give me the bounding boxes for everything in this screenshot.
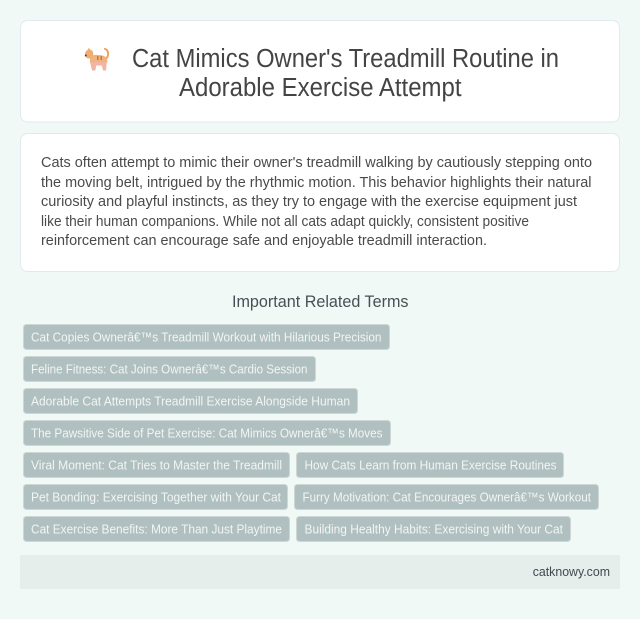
text block: summary paragraph (41, 155, 592, 249)
tag 2 (24, 356, 316, 382)
tag 9 (24, 516, 290, 542)
tag 4 (24, 420, 390, 446)
tag 7: Pet Bonding: Exercising Together with Your Cat (31, 490, 281, 504)
tag 2: Feline Fitness: Cat Joins Ownerâ€™s Cardio Session (31, 362, 308, 376)
tag 1: Cat Copies Ownerâ€™s Treadmill Workout with Hilarious Precision (31, 330, 382, 344)
tag 4: The Pawsitive Side of Pet Exercise: Cat Mimics Ownerâ€™s Moves (31, 426, 382, 440)
text block: summary paragraph: Cats often attempt to mimic their owner's treadmill walking by cautiously stepping onto (41, 155, 592, 171)
title (132, 45, 559, 102)
panel: title card (20, 20, 620, 122)
tag 10: Building Healthy Habits: Exercising with Your Cat (304, 522, 563, 536)
tag 3: Adorable Cat Attempts Treadmill Exercise Alongside Human (31, 394, 350, 408)
tag 6 (296, 452, 564, 478)
tag list (24, 324, 598, 542)
tag 8 (294, 484, 598, 510)
text block: summary paragraph: like their human companions. While not all cats adapt quickly, consistent positive (41, 214, 529, 230)
text block: summary paragraph: reinforcement can encourage safe and enjoyable treadmill interaction. (41, 233, 487, 249)
icon: cat (85, 48, 109, 70)
panel: summary card (20, 134, 620, 272)
tag 10 (296, 516, 570, 542)
text block: summary paragraph: curiosity and playful instincts, as they try to engage with the exercise equipment just (41, 194, 577, 210)
tag 6: How Cats Learn from Human Exercise Routines (304, 458, 556, 472)
title: Cat Mimics Owner's Treadmill Routine in (132, 45, 559, 73)
tag 5: Viral Moment: Cat Tries to Master the Treadmill (31, 458, 282, 472)
footer: catknowy.com (533, 564, 610, 579)
tag 7 (24, 484, 288, 510)
tag 1 (24, 324, 390, 350)
footer (20, 555, 620, 589)
title: Adorable Exercise Attempt (179, 74, 462, 102)
heading: important related terms: Important Related Terms (232, 292, 408, 311)
tag 3 (24, 388, 358, 414)
text block: summary paragraph: the moving belt, intrigued by the rhythmic motion. This behavior highlights their natural (41, 175, 592, 191)
tag 8: Furry Motivation: Cat Encourages Ownerâ€™s Workout (302, 490, 591, 504)
tag 5 (24, 452, 290, 478)
tag 9: Cat Exercise Benefits: More Than Just Playtime (31, 522, 282, 536)
